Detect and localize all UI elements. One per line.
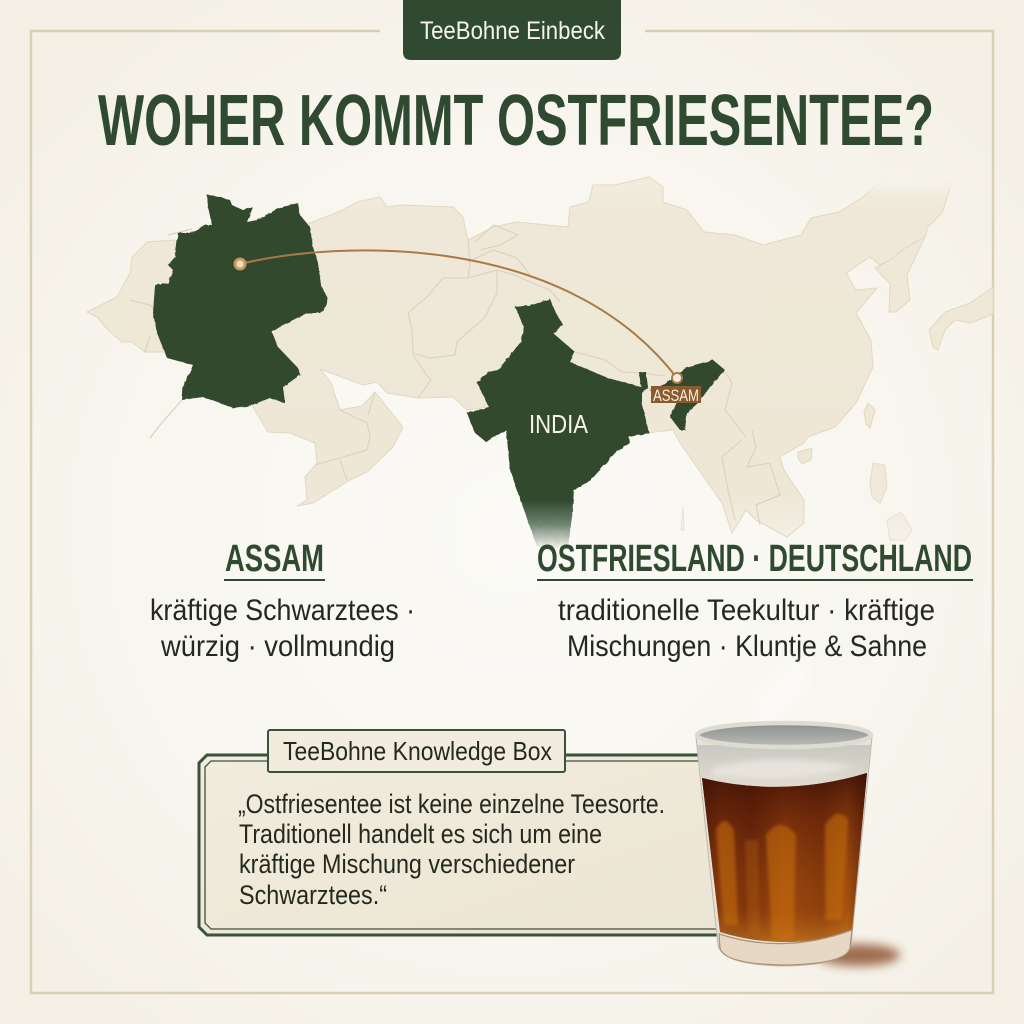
quote text: „Ostfriesentee ist keine einzelne Teesorte. bbox=[238, 789, 665, 819]
glass shadow bbox=[816, 944, 900, 966]
label: Assam: ASSAM bbox=[653, 386, 699, 405]
route arc bbox=[240, 250, 677, 378]
glass body bbox=[696, 737, 872, 966]
box frame bbox=[199, 755, 730, 935]
description: Mischungen · Kluntje & Sahne bbox=[567, 630, 927, 663]
header tab bbox=[403, 0, 621, 60]
description: traditionelle Teekultur · kräftige bbox=[558, 594, 935, 627]
underline bbox=[224, 579, 325, 581]
label: India: INDIA bbox=[529, 409, 589, 439]
box tag: TeeBohne Knowledge Box bbox=[283, 736, 552, 766]
quote text: Traditionell handelt es sich um eine bbox=[239, 819, 602, 849]
pin: Germany bbox=[234, 258, 246, 270]
box tag bbox=[268, 730, 565, 772]
region: Assam bbox=[650, 360, 725, 430]
description: kräftige Schwarztees · bbox=[150, 594, 415, 627]
glass facets bbox=[716, 814, 848, 940]
quote text: kräftige Mischung verschiedener bbox=[239, 849, 575, 879]
country borders bbox=[130, 225, 780, 525]
country: India bbox=[467, 299, 649, 547]
tea surface highlight bbox=[712, 759, 855, 778]
heading: Assam: ASSAM bbox=[225, 538, 324, 580]
tea bbox=[702, 773, 867, 942]
beige land masses bbox=[87, 177, 993, 540]
description: würzig · vollmundig bbox=[160, 630, 395, 663]
steam bbox=[766, 665, 797, 725]
icon: glass of tea bbox=[696, 665, 900, 966]
panel: knowledge box bbox=[199, 730, 730, 935]
panel: Assam bbox=[150, 538, 415, 663]
quote text: Schwarztees.“ bbox=[239, 880, 387, 910]
underline bbox=[537, 579, 973, 581]
panel: Ostfriesland bbox=[537, 538, 973, 663]
pin: Assam bbox=[671, 372, 683, 384]
header tab: TeeBohne Einbeck bbox=[420, 17, 605, 45]
upper empty glass bbox=[697, 745, 871, 786]
country: Germany bbox=[153, 195, 327, 408]
thin coast lines bbox=[150, 229, 192, 438]
glass base bbox=[719, 930, 852, 965]
map bbox=[87, 170, 993, 547]
glass rim bbox=[697, 723, 871, 747]
north-east map fade bbox=[835, 170, 975, 190]
